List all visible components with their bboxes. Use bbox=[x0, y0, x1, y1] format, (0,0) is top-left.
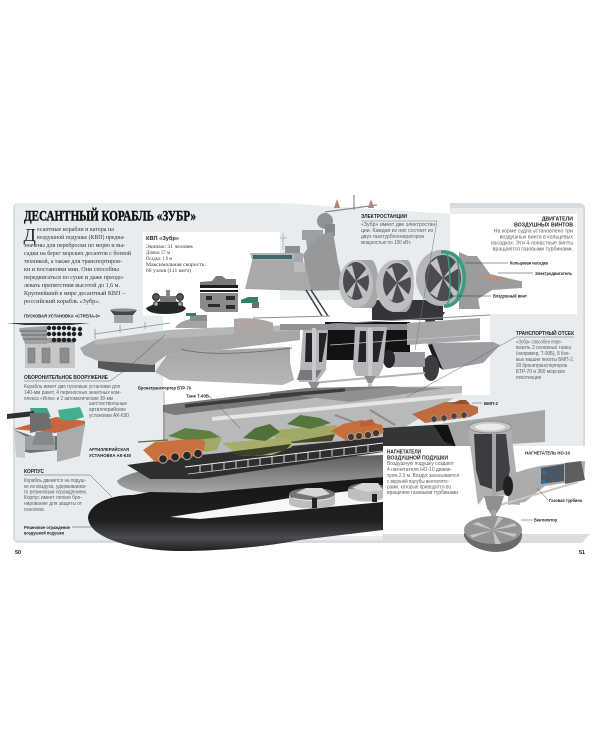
callout: lift fans: тром 2,5 м. Воздух засасывается bbox=[387, 473, 459, 479]
panel: specifications: Максимальная скорость: bbox=[146, 262, 207, 268]
callout: transport compartment: БТР-70 и 360 морских bbox=[516, 369, 565, 375]
callout: transport compartment: «Зубр» способен пере- bbox=[516, 340, 562, 346]
label: electric motor: Электродвигатель bbox=[535, 271, 572, 277]
vehicle: BMP-2 bbox=[412, 400, 478, 423]
panel: specifications: Длина: 57 м bbox=[146, 250, 171, 256]
label: launcher: ПУСКОВАЯ УСТАНОВКА «СТРЕЛА-3» bbox=[24, 314, 100, 318]
fan 1 bbox=[339, 260, 379, 308]
deck: right wall bbox=[383, 410, 545, 447]
callout: power plants: мощностью по 100 кВт. bbox=[361, 240, 411, 246]
vehicle: T-90 front tank bbox=[222, 424, 292, 456]
panel: propeller engines: вращаются газовыми турбинами. bbox=[493, 246, 573, 252]
text block: introduction: значены для переброски по морю и вы- bbox=[24, 242, 125, 249]
title: ДЕСАНТНЫЙ КОРАБЛЬ «ЗУБР» bbox=[24, 208, 196, 224]
callout: transport compartment: (например, Т-90Б), 8 бое- bbox=[516, 351, 570, 357]
callout: transport compartment: ТРАНСПОРТНЫЙ ОТСЕК bbox=[516, 329, 575, 337]
callout: lift fans: рами, которые приводятся во bbox=[387, 484, 451, 490]
panel: specifications: Осадка: 1,6 м bbox=[146, 256, 173, 262]
text block: introduction: Д bbox=[24, 225, 36, 245]
label: fan: Вентилятор bbox=[534, 518, 557, 524]
callout: hull: Корпус имеет легкое бро- bbox=[24, 495, 82, 501]
icon: Strela-3 launcher bbox=[7, 323, 90, 368]
panel: propeller engines: ВОЗДУШНЫХ ВИНТОВ bbox=[514, 222, 573, 228]
callout: defensive armament: шестиствольные bbox=[89, 401, 127, 407]
label: electric motor bbox=[498, 271, 572, 277]
label: air propeller: Воздушный винт bbox=[493, 292, 528, 300]
text block: introduction: ки и постановки мин. Они способны bbox=[24, 266, 119, 273]
label: T-90B bbox=[186, 394, 240, 428]
ship: superstructure and fans bbox=[241, 195, 522, 345]
callout: defensive armament: артиллерийские bbox=[89, 406, 126, 413]
label: artillery unit bbox=[89, 445, 131, 459]
page number: left: 50 bbox=[15, 550, 21, 556]
label: BMP-2 bbox=[472, 401, 498, 407]
callout: transport compartment: возить 3 основных танка bbox=[516, 345, 571, 351]
label: gas turbine: Газовая турбина bbox=[549, 497, 582, 504]
label: BTR-70: Бронетранспортер БТР-70 bbox=[138, 386, 191, 392]
icon: ship front view bbox=[146, 290, 186, 314]
vehicle: BTR-70 bbox=[138, 439, 205, 463]
text block: introduction: техникой, а также для транспортиров- bbox=[24, 258, 122, 265]
icon: NO-10 blower bbox=[464, 421, 585, 552]
callout: transport compartment: вых машин пехоты БМП-2, bbox=[516, 357, 574, 363]
vehicle: T-90 rear tank bbox=[263, 415, 337, 443]
panel: propeller engines: ДВИГАТЕЛИ bbox=[542, 216, 573, 222]
hull: rubber skirt bbox=[88, 477, 383, 551]
callout: transport compartment: 30 бронетранспортеров bbox=[516, 363, 567, 369]
callout: power plants: двух газотурбогенераторов bbox=[361, 234, 424, 240]
callout: lift fans bbox=[387, 450, 459, 496]
icon: launcher pedestal bbox=[110, 308, 137, 323]
callout: lift fans: с верхней палубы вентилято- bbox=[387, 478, 449, 485]
label: NO-10 blower: НАГНЕТАТЕЛЬ НО-10 bbox=[525, 450, 570, 456]
label: fan bbox=[521, 518, 557, 524]
label: air propeller bbox=[445, 292, 528, 300]
icon: lift fan callout panel bbox=[383, 446, 590, 541]
ship: air cushion hull bbox=[80, 313, 500, 412]
icon: AK-630 artillery unit bbox=[7, 407, 85, 462]
callout: lift fans: вращение газовыми турбинами bbox=[387, 490, 458, 496]
fan 3 with ring nozzle bbox=[403, 250, 522, 345]
callout: defensive armament: ОБОРОНИТЕЛЬНОЕ ВООРУЖЕНИЕ bbox=[24, 375, 108, 381]
panel: specifications bbox=[146, 235, 207, 274]
callout: transport compartment bbox=[407, 329, 575, 397]
panel: specifications: КВП «Зубр» bbox=[146, 235, 179, 242]
callout: hull: осколков. bbox=[24, 507, 45, 513]
panel: specifications: 60 узлов (111 км/ч) bbox=[146, 267, 191, 274]
callout: lift fans: Воздушную подушку создают bbox=[387, 461, 455, 467]
panel: propeller engines bbox=[491, 216, 573, 252]
text block: introduction: левать препятствия высотой до 1,6 м. bbox=[24, 282, 120, 289]
callout: lift fans: НАГНЕТАТЕЛИ bbox=[387, 450, 421, 456]
callout: power plants: ЭЛЕКТРОСТАНЦИИ bbox=[361, 214, 407, 220]
vehicle: second BTR-70 bbox=[331, 419, 384, 441]
callout: power plants: «Зубр» имеет две электростан- bbox=[361, 222, 437, 228]
text block: introduction bbox=[24, 225, 132, 305]
text block: introduction: российский корабль «Зубр». bbox=[24, 298, 100, 305]
label: gas turbine bbox=[537, 488, 582, 504]
callout: hull: Корабль движется на подуш- bbox=[24, 478, 86, 484]
callout: power plants: ции. Каждая из них состоит из bbox=[361, 228, 434, 234]
label: BTR-70 bbox=[138, 386, 191, 440]
label: artillery unit: УСТАНОВКА АК-630 bbox=[89, 453, 131, 459]
vehicle: tank behind the first BTR bbox=[168, 428, 222, 452]
callout: lift fans: 4 нагнетателя НО-10 диаме- bbox=[387, 467, 452, 473]
icon: lift fan modules on the deck bbox=[289, 483, 386, 508]
label: rubber skirt: воздушной подушки bbox=[24, 530, 64, 536]
text block: introduction: воздушной подушке (КВП) предна- bbox=[37, 234, 125, 241]
label: artillery unit: АРТИЛЛЕРИЙСКАЯ bbox=[89, 445, 129, 453]
deck: vehicle platform with rail bbox=[127, 437, 383, 479]
callout: defensive armament: 140-мм ракет, 4 переносных зенитных ком- bbox=[24, 390, 121, 396]
callout: lift fans: ВОЗДУШНОЙ ПОДУШКИ bbox=[387, 454, 448, 462]
callout: transport compartment: пехотинцев bbox=[516, 375, 541, 381]
panel: propeller engines: насадках. Эти 4-лопастные винты bbox=[491, 240, 573, 246]
callout: defensive armament: плекса «Игла» и 2 автоматические 30-мм bbox=[24, 396, 113, 402]
text block: introduction: Крупнейший в мире десантный КВП – bbox=[24, 290, 126, 297]
callout: hull: нирование для защиты от bbox=[24, 501, 83, 507]
label: rubber skirt bbox=[24, 525, 96, 536]
callout: power plants bbox=[361, 214, 437, 350]
panel: propeller engines: воздушных винта в кольцевых bbox=[500, 234, 573, 240]
fan 2 bbox=[376, 260, 414, 312]
deck: transport compartment bbox=[163, 386, 462, 455]
callout: defensive armament: Корабль имеет две пусковые установки для bbox=[24, 384, 120, 390]
deck: lower disc bbox=[117, 455, 383, 494]
callout: hull: го резиновым ограждением. bbox=[24, 490, 87, 496]
text block: introduction: садки на берег морских десантов с боевой bbox=[24, 250, 132, 257]
label: ring nozzle: Кольцевая насадка bbox=[510, 260, 548, 266]
page number: right: 51 bbox=[579, 550, 585, 556]
text block: introduction: есантные корабли и катера на bbox=[37, 226, 114, 233]
panel: propeller engines: На корме судна установлено три bbox=[494, 228, 573, 234]
callout: defensive armament bbox=[24, 335, 165, 419]
label: BMP-2: БМП-2 bbox=[484, 401, 498, 407]
label: ring nozzle bbox=[465, 260, 548, 266]
text block: introduction: передвигаться по суше и даже преодо- bbox=[24, 275, 124, 281]
callout: hull: КОРПУС bbox=[24, 469, 44, 475]
callout: hull bbox=[24, 469, 112, 513]
callout: defensive armament: установки АК-630 bbox=[89, 413, 129, 419]
panel: specifications: Экипаж: 31 человек bbox=[146, 244, 193, 250]
label: rubber skirt: Резиновое ограждение bbox=[24, 525, 70, 530]
icon: ship side and top views bbox=[200, 276, 238, 312]
callout: hull: ке из воздуха, удерживаемо- bbox=[24, 484, 87, 490]
label: T-90B: Танк Т-90Б bbox=[186, 394, 209, 400]
